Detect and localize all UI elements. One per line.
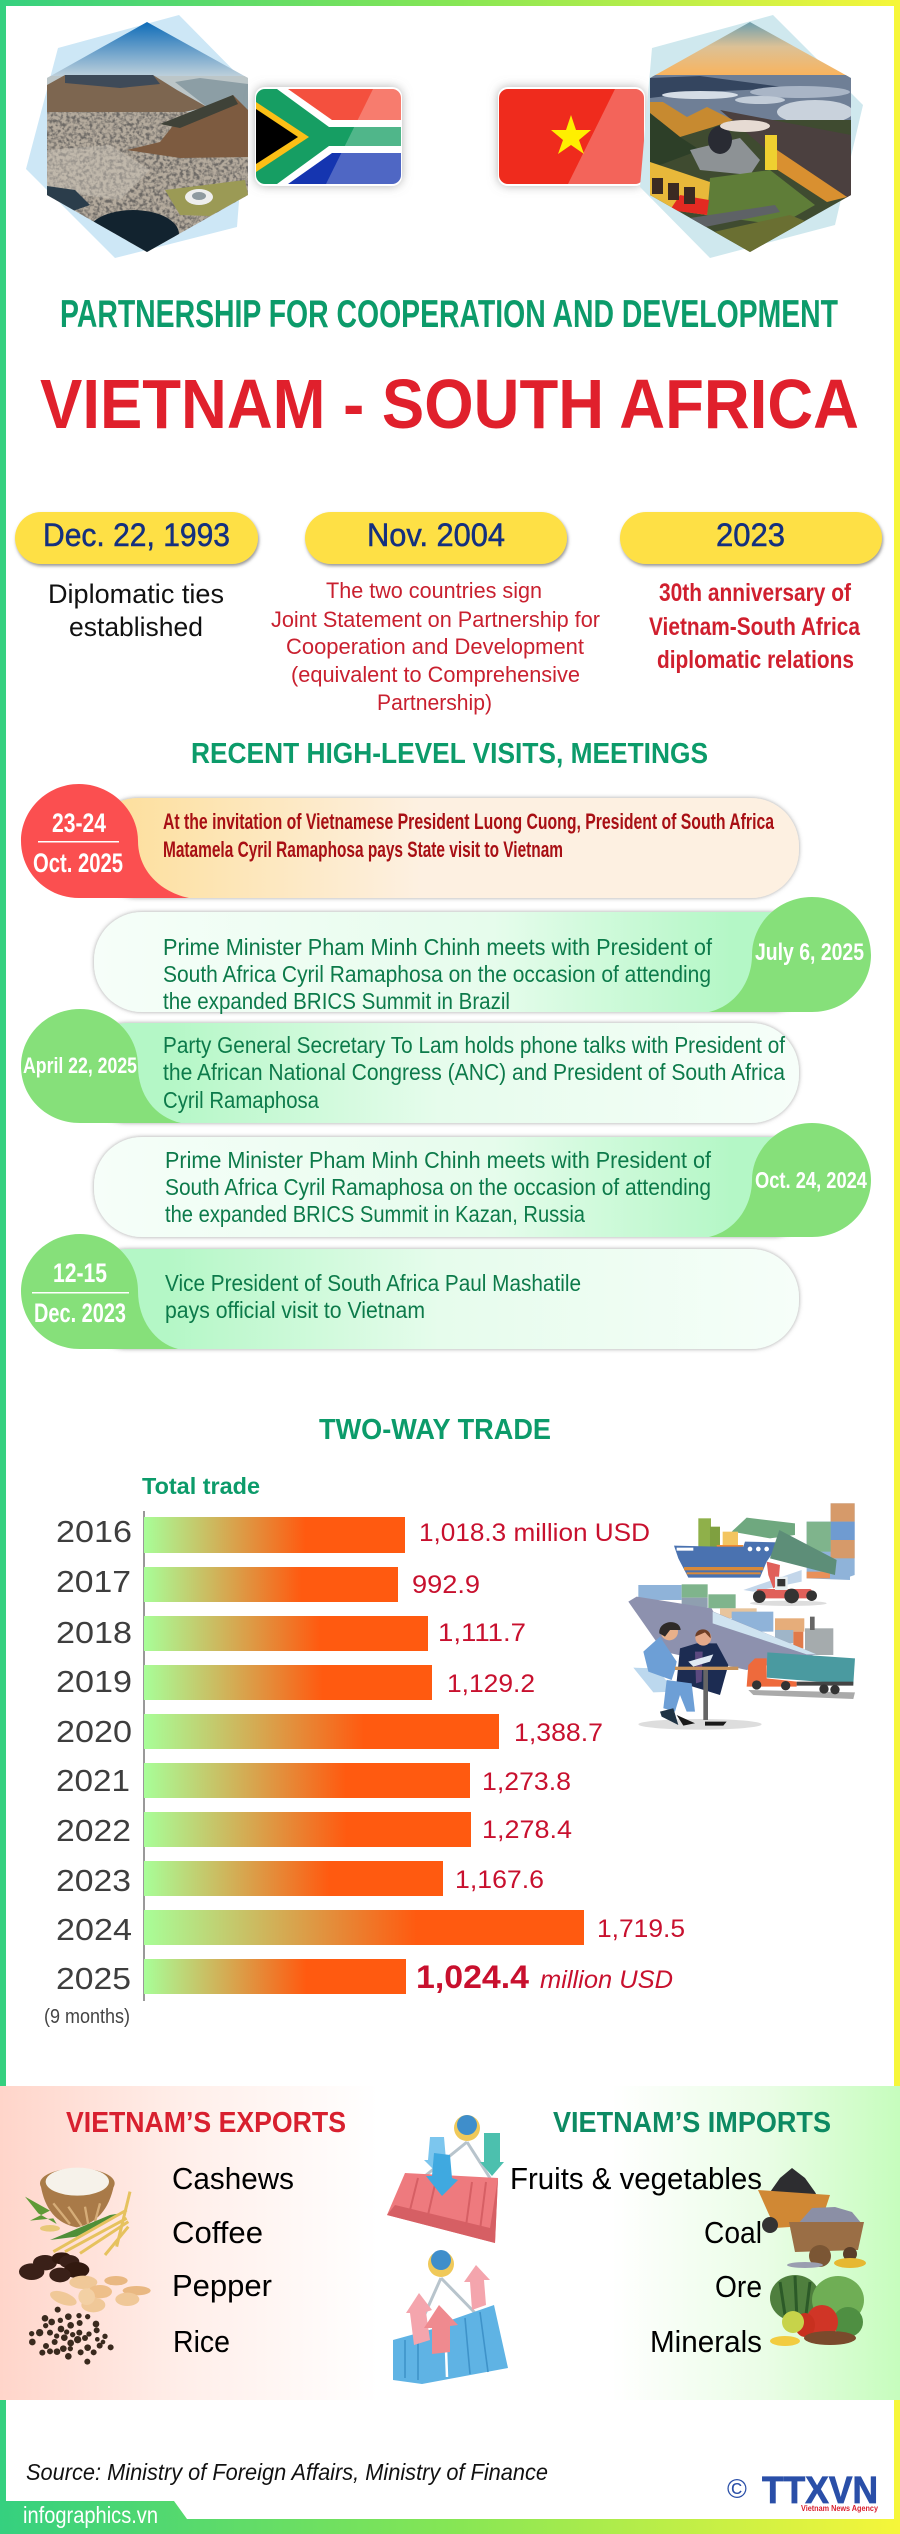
import items [510,2161,762,2359]
description: Vietnam-South Africa [649,613,861,641]
description: (equivalent to Comprehensive [291,662,580,687]
visit card: Oct. 24, 2024 [94,1123,871,1237]
illustration: coal and ore carts [758,2168,866,2268]
value labels [412,1519,685,1995]
description [48,579,224,642]
export items [172,2161,294,2359]
source: Source: Ministry of Foreign Affairs, Ministry of Finance [26,2459,548,2485]
import items: Fruits & vegetables [510,2161,762,2196]
timeline column: 2023 [620,512,882,674]
heading: imports: VIETNAM’S IMPORTS [553,2107,831,2139]
import items: Ore [715,2269,762,2304]
description [163,809,775,862]
logo: TTXVN: © [727,2474,747,2504]
value labels: 1,167.6 [455,1866,544,1894]
visit card: April 22, 2025 [21,1009,799,1123]
description: Vice President of South Africa Paul Mashatile [165,1270,581,1296]
date blob [21,1234,178,1349]
year labels: 2023 [56,1863,131,1898]
heading: two-way trade: TWO-WAY TRADE [319,1414,551,1446]
description: Joint Statement on Partnership for [271,607,600,632]
heading: exports: VIETNAM’S EXPORTS [66,2107,346,2139]
year labels [56,1514,132,1996]
description: Matamela Cyril Ramaphosa pays State visit to Vietnam [163,837,563,862]
photo: Cape Town hexagon [26,15,248,258]
bars [144,1517,584,1994]
heading: recent visits: RECENT HIGH-LEVEL VISITS, MEETINGS [191,738,708,770]
value labels: 1,018.3 million USD [419,1519,650,1547]
import items: Coal [704,2215,762,2250]
date pill [620,512,882,564]
date blob [21,784,189,898]
photo: Fansipan hexagon [640,15,863,258]
footer band [0,2501,900,2534]
axis title: Total trade [142,1473,260,1499]
description: South Africa Cyril Ramaphosa on the occasion of attending [163,961,711,987]
year labels: 2022 [56,1813,131,1848]
description: South Africa Cyril Ramaphosa on the occasion of attending [165,1174,711,1200]
import items: Minerals [650,2324,762,2359]
illustration: rice, coffee, cashews, pepper [19,2168,151,2365]
description: Prime Minister Pham Minh Chinh meets with President of [165,1147,712,1173]
date blob [709,897,871,1012]
logo: TTXVN: TTXVN [762,2470,878,2512]
description: Prime Minister Pham Minh Chinh meets with President of [163,934,713,960]
date blob: July 6, 2025 [755,939,864,966]
value labels: 1,719.5 [597,1915,685,1943]
logo: TTXVN: Vietnam News Agency [801,2504,878,2513]
year labels: 2025 [56,1961,131,1996]
visit card: Oct. 2025 [21,784,799,898]
year labels: 2019 [56,1664,132,1699]
year labels: 2020 [56,1714,132,1749]
description: the African National Congress (ANC) and President of South Africa [163,1059,785,1085]
timeline column: 1993 [15,512,258,642]
description [649,579,861,674]
footer site name: infographics.vn [23,2502,158,2528]
description: Diplomatic ties [48,579,224,609]
description: Party General Secretary To Lam holds phone talks with President of [163,1032,786,1058]
panel: exports and imports [0,2086,900,2400]
footnote: (9 months) [44,2006,130,2028]
export items: Pepper [172,2268,272,2303]
illustration: ships, truck and businessmen [628,1503,855,1730]
date blob: 12-15 [53,1258,107,1288]
description: The two countries sign [326,578,542,603]
date blob [21,1009,181,1123]
icon: blue containers with up arrows [393,2250,508,2384]
description: established [69,612,203,642]
description [163,934,713,1014]
description: the expanded BRICS Summit in Kazan, Russia [165,1201,585,1227]
value labels: 1,024.4 [416,1959,529,1995]
year labels: 2018 [56,1615,132,1650]
date blob: Oct. 2025 [33,848,123,878]
description: Partnership) [377,690,492,715]
illustration: fruits and vegetables [770,2275,864,2346]
date blob: 23-24 [52,808,106,838]
description [163,1032,786,1113]
export items: Coffee [172,2215,263,2250]
year labels: 2024 [56,1912,132,1947]
date blob: Oct. 24, 2024 [755,1167,867,1193]
value labels: 1,111.7 [438,1619,526,1647]
description: Cooperation and Development [286,634,584,659]
icon: star [551,115,591,154]
timeline column: 2004 [271,512,600,715]
bar chart: total trade [44,1473,685,2028]
date blob: Dec. 2023 [34,1298,126,1328]
description: pays official visit to Vietnam [165,1297,425,1323]
export items: Cashews [172,2161,294,2196]
value labels: 1,129.2 [447,1670,535,1698]
description [165,1147,712,1227]
visit card: July 6, 2025 [94,897,871,1014]
description [165,1270,581,1323]
year labels: 2021 [56,1763,130,1798]
description [271,578,600,715]
date pill: Nov. 2004 [367,517,505,553]
icon: red container with down arrows [387,2115,504,2243]
value labels: 1,278.4 [482,1816,572,1844]
year labels: 2016 [56,1514,132,1549]
date blob [709,1123,871,1237]
description: 30th anniversary of [659,579,852,607]
date pill [305,512,567,564]
export items: Rice [173,2324,230,2359]
description: diplomatic relations [657,646,854,674]
flag: South Africa [255,87,402,186]
date pill [15,512,258,564]
value labels: 1,273.8 [482,1768,571,1796]
date pill: Dec. 22, 1993 [43,517,230,553]
description: Cyril Ramaphosa [163,1087,319,1113]
value labels: 1,388.7 [514,1719,603,1747]
description: the expanded BRICS Summit in Brazil [163,988,510,1014]
date blob: April 22, 2025 [23,1053,137,1078]
value labels: 992.9 [412,1571,480,1599]
value labels: million USD [540,1966,673,1994]
date pill: 2023 [716,517,785,553]
visit card: Dec. 2023 [21,1234,799,1349]
flag: Vietnam [498,87,645,186]
year labels: 2017 [56,1564,131,1599]
